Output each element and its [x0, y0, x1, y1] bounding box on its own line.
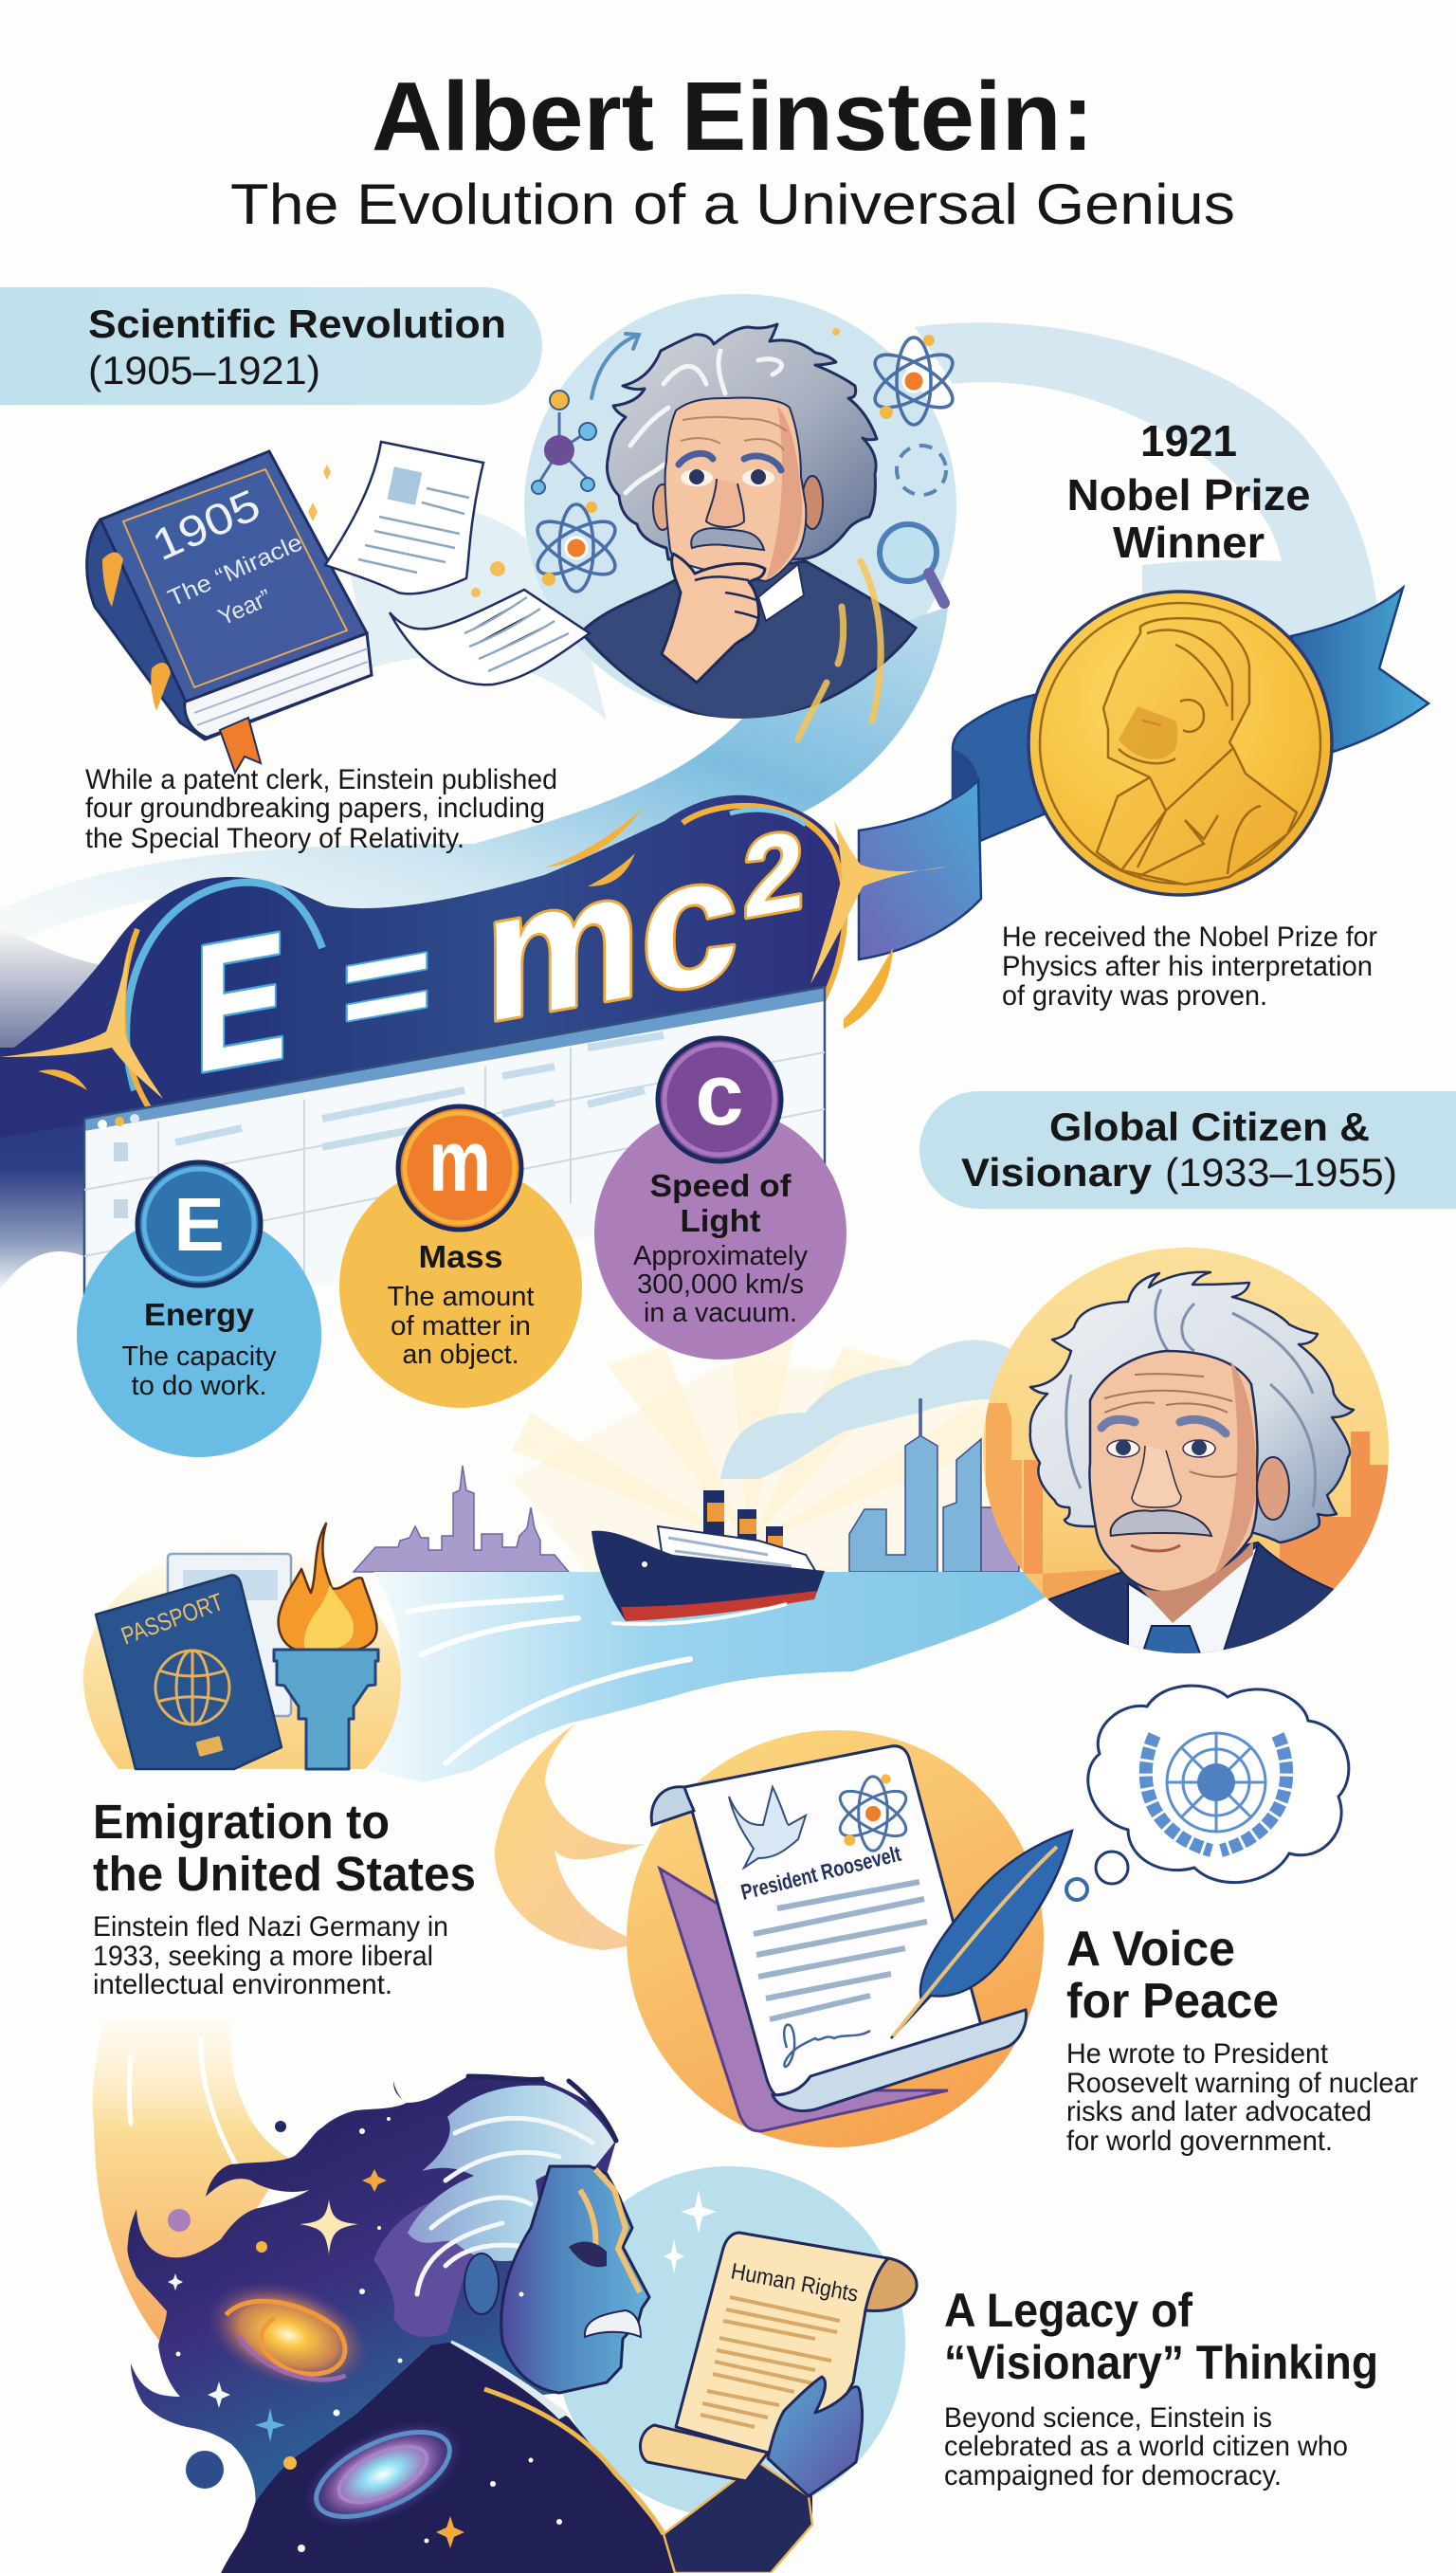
- heading and text: A Voice for Peace: A Voice: [1066, 1922, 1235, 1977]
- panel: Global Citizen heading pill: Global Citizen &: [1049, 1104, 1370, 1149]
- heading and text: Emigration: Emigration to: [93, 1795, 390, 1849]
- heading and text: A Legacy of Visionary Thinking: A Legacy of: [944, 2284, 1192, 2337]
- decorative gold streaks: [798, 561, 881, 739]
- atom on letter: [833, 1774, 913, 1851]
- circle: Energy: [77, 1162, 321, 1457]
- eyes: [681, 469, 713, 486]
- heading: 1921 Nobel Prize Winner: Winner: [1113, 518, 1265, 567]
- text: Nobel description: He received the Nobel Prize for: [1002, 922, 1377, 953]
- Nobel medal: [1028, 592, 1332, 895]
- white streaks on swoosh: [129, 2038, 237, 2166]
- right sparkle: [810, 821, 948, 984]
- heading: 1921 Nobel Prize Winner: [1067, 416, 1310, 567]
- icon: molecule: [532, 391, 596, 494]
- heading and text: Emigration: [93, 1795, 476, 2000]
- circle: Speed of Light: 300,000 km/s: [637, 1269, 804, 1300]
- nose: [1132, 1446, 1181, 1507]
- hand: [662, 554, 765, 683]
- galaxy 1: [192, 2262, 384, 2408]
- orange face rim: [580, 2169, 640, 2292]
- lapel: [484, 2389, 664, 2534]
- wrinkles: [1104, 1374, 1237, 1477]
- heading and text: A Voice for Peace: risks and later advocated: [1066, 2096, 1372, 2127]
- panel: Global Citizen heading pill: (1933–1955): [1165, 1150, 1397, 1195]
- purple hair: [373, 2190, 493, 2337]
- torch flame: [279, 1524, 377, 1650]
- text: Nobel description: [1002, 922, 1377, 1012]
- circle: Speed of Light: Approximately: [633, 1241, 808, 1271]
- envelope: [660, 1869, 948, 2131]
- panel: Scientific Revolution heading pill: (1905–1921): [88, 348, 320, 392]
- circle: Mass: Mass: [419, 1239, 502, 1274]
- passport globe: [155, 1651, 229, 1724]
- Human Rights scroll: [640, 2233, 917, 2573]
- equation: E = mc2: 2: [743, 807, 804, 942]
- eyes: [1107, 1440, 1139, 1457]
- illustration: 1905 Miracle Year book: 1905: [145, 480, 267, 570]
- equation: E = mc2: =: [341, 898, 432, 1073]
- heading and text: A Voice for Peace: for Peace: [1066, 1974, 1279, 2029]
- face: [1089, 1351, 1257, 1593]
- heading and text: A Voice for Peace: He wrote to President: [1066, 2038, 1328, 2070]
- jacket: [581, 561, 917, 721]
- title: The Evolution of a Universal Genius: [230, 173, 1235, 236]
- skyline inside portrait: [986, 1403, 1022, 1570]
- page: [684, 1746, 986, 2100]
- passport and torch vignette: PASSPORT: [118, 1587, 227, 1651]
- illustration: flying papers: [325, 442, 590, 684]
- heading: 1921 Nobel Prize Winner: Nobel Prize: [1067, 470, 1310, 520]
- vignette: letter to Roosevelt: [627, 1730, 1072, 2147]
- ribbon swirl behind Nobel heading: [915, 322, 1380, 645]
- brows: [679, 453, 781, 470]
- jacket: [1048, 1542, 1335, 1653]
- collar: [758, 564, 804, 621]
- hair: [607, 324, 877, 559]
- icon: gold sparkles near book: [308, 328, 840, 597]
- orange wisps: [38, 806, 893, 1090]
- data table behind circles: [84, 987, 825, 1327]
- galaxy 2: [285, 2398, 481, 2551]
- illustration: 1905 Miracle Year book: [87, 451, 372, 773]
- ship: [592, 1490, 825, 1624]
- text: patent clerk description: [85, 764, 557, 854]
- moustache: [691, 528, 764, 550]
- circle backdrop: young Einstein: [524, 294, 956, 719]
- circle: Speed of Light: c: [695, 1047, 744, 1143]
- heading and text: A Legacy of Visionary Thinking: campaigned for democracy.: [944, 2460, 1282, 2491]
- panel: Scientific Revolution heading pill: Scientific Revolution: [88, 301, 506, 346]
- water swoosh: [369, 1572, 1077, 1782]
- dove: [729, 1787, 806, 1868]
- hair: [1030, 1272, 1354, 1542]
- swoosh behind book and papers: [341, 506, 607, 721]
- illustration: thinking Einstein: [581, 324, 917, 721]
- hair strands: [1066, 1289, 1316, 1507]
- ribbon behind medal: [859, 588, 1429, 959]
- nose: [706, 479, 744, 527]
- Human Rights scroll: Human Rights: [729, 2258, 861, 2308]
- ear: [464, 2254, 499, 2314]
- stars on blue circle: [664, 2190, 717, 2273]
- ears: [653, 484, 672, 530]
- neck: [1138, 1541, 1253, 1623]
- text: Nobel description: of gravity was proven.: [1002, 980, 1267, 1012]
- brows: [1101, 1419, 1226, 1433]
- thought cloud with UN emblem: [1066, 1686, 1349, 1900]
- yellow crescent swirl: [495, 1724, 645, 1950]
- illustration: 1905 Miracle Year book: Year”: [214, 584, 275, 630]
- icon: atom upper-right: [867, 335, 960, 425]
- medal bust: [1097, 618, 1297, 885]
- heading and text: A Legacy of Visionary Thinking: [944, 2284, 1378, 2491]
- portrait: elder Einstein: [983, 1248, 1393, 1669]
- skyline: right city: [849, 1399, 1076, 1572]
- text: Nobel description: Physics after his interpretation: [1002, 951, 1373, 982]
- stars: [300, 2199, 358, 2254]
- passport and torch vignette: [83, 1524, 401, 1769]
- heading and text: A Legacy of Visionary Thinking: “Visionary” Thinking: [944, 2336, 1378, 2389]
- moustache: [585, 2310, 641, 2337]
- circle: Energy: Energy: [144, 1297, 255, 1332]
- heading and text: A Voice for Peace: Roosevelt warning of nuclear: [1066, 2068, 1418, 2099]
- heading and text: Emigration: Einstein fled Nazi Germany in: [93, 1911, 448, 1943]
- circle: Mass: [339, 1106, 582, 1408]
- heading and text: Emigration: 1933, seeking a more liberal: [93, 1941, 433, 1972]
- rings: [126, 883, 322, 1090]
- equation: E = mc2: E: [193, 893, 287, 1113]
- silver hair: [408, 2086, 614, 2261]
- circle: Energy: The capacity: [121, 1341, 277, 1372]
- icon: upward arrow: [592, 334, 639, 398]
- icon: magnifying glass: [880, 524, 944, 603]
- circle: Mass: an object.: [402, 1340, 519, 1370]
- left grey fade: [0, 924, 123, 1071]
- lower body: [221, 2342, 812, 2573]
- circle: Energy: E: [173, 1182, 225, 1267]
- ear: [1257, 1457, 1289, 1520]
- circle: Speed of Light: Speed of: [650, 1168, 792, 1203]
- passport: [96, 1575, 282, 1769]
- smoke clouds: [720, 1340, 1033, 1479]
- illustration: 1905 Miracle Year book: The “Miracle: [164, 529, 306, 611]
- panel: E=mc2 energy band: [0, 795, 948, 1289]
- signature: [784, 2025, 870, 2067]
- circle: Speed of Light: Light: [681, 1203, 761, 1238]
- yellow swoosh behind legacy figure: [93, 2019, 288, 2342]
- scroll curls: [651, 1787, 694, 1825]
- hair streaks: [626, 351, 781, 493]
- panel: Global Citizen heading pill: [919, 1091, 1456, 1209]
- circle: Mass: of matter in: [391, 1311, 531, 1341]
- text: patent clerk description: the Special Theory of Relativity.: [85, 823, 464, 854]
- decorative orbs near legacy figure: [168, 2121, 286, 2489]
- icon: dashed orbit: [897, 446, 946, 495]
- circle: Speed of Light: in a vacuum.: [644, 1298, 797, 1328]
- panel: Scientific Revolution heading pill: [0, 287, 542, 405]
- swoosh from portrait to equation: [0, 607, 948, 948]
- heading and text: Emigration: intellectual environment.: [93, 1969, 392, 2000]
- heading and text: A Voice for Peace: [1066, 1922, 1418, 2157]
- circle: Mass: m: [428, 1113, 491, 1210]
- text: patent clerk description: four groundbreaking papers, including: [85, 793, 545, 824]
- paper: [168, 1554, 291, 1716]
- wrinkles: [681, 417, 787, 450]
- hair strands: [417, 2118, 592, 2294]
- heading and text: Emigration: the United States: [93, 1847, 476, 1901]
- letter lines: [754, 1882, 927, 2019]
- skyline: left city: [354, 1466, 569, 1572]
- moustache: [1111, 1510, 1211, 1536]
- equation: E = mc2: mc: [484, 812, 738, 1062]
- heading and text: A Legacy of Visionary Thinking: celebrated as a world citizen who: [944, 2431, 1348, 2462]
- left sparkle: [0, 948, 163, 1099]
- eye and brow: [569, 2242, 607, 2267]
- icon: atom lower-left: [530, 502, 623, 592]
- heading and text: A Legacy of Visionary Thinking: Beyond science, Einstein is: [944, 2402, 1272, 2434]
- circle: Speed of Light: [594, 1038, 846, 1359]
- UN emblem: [1146, 1733, 1286, 1851]
- heading and text: A Voice for Peace: for world government.: [1066, 2126, 1333, 2157]
- addressee: President Roosevelt: [738, 1841, 903, 1905]
- passport chip: [195, 1736, 224, 1757]
- collar: [451, 2342, 566, 2418]
- arm: [664, 2462, 812, 2573]
- light rays behind ship: [512, 1327, 1071, 1572]
- illustration: cosmic Einstein legacy: [127, 2076, 812, 2573]
- hand: [768, 2377, 863, 2496]
- torch body: [274, 1650, 378, 1769]
- quill: [891, 1831, 1072, 2038]
- equation: E = mc2: [193, 807, 804, 1113]
- title: Albert Einstein:: [372, 62, 1094, 171]
- mouth: [1131, 1545, 1180, 1551]
- bookmark: [220, 718, 261, 773]
- dark hair outline: [468, 2076, 616, 2141]
- face: [665, 397, 806, 581]
- face: [501, 2166, 649, 2393]
- text: patent clerk description: While a patent clerk, Einstein published: [85, 764, 557, 795]
- title: [230, 62, 1235, 236]
- circle: Mass: The amount: [387, 1282, 535, 1312]
- heading: 1921 Nobel Prize Winner: 1921: [1140, 416, 1237, 465]
- cosmic hair silhouette: [127, 2076, 616, 2509]
- circle: Energy: to do work.: [131, 1371, 267, 1401]
- blue circle behind legacy figure: [555, 2166, 905, 2517]
- panel: Global Citizen heading pill: Visionary: [961, 1150, 1153, 1195]
